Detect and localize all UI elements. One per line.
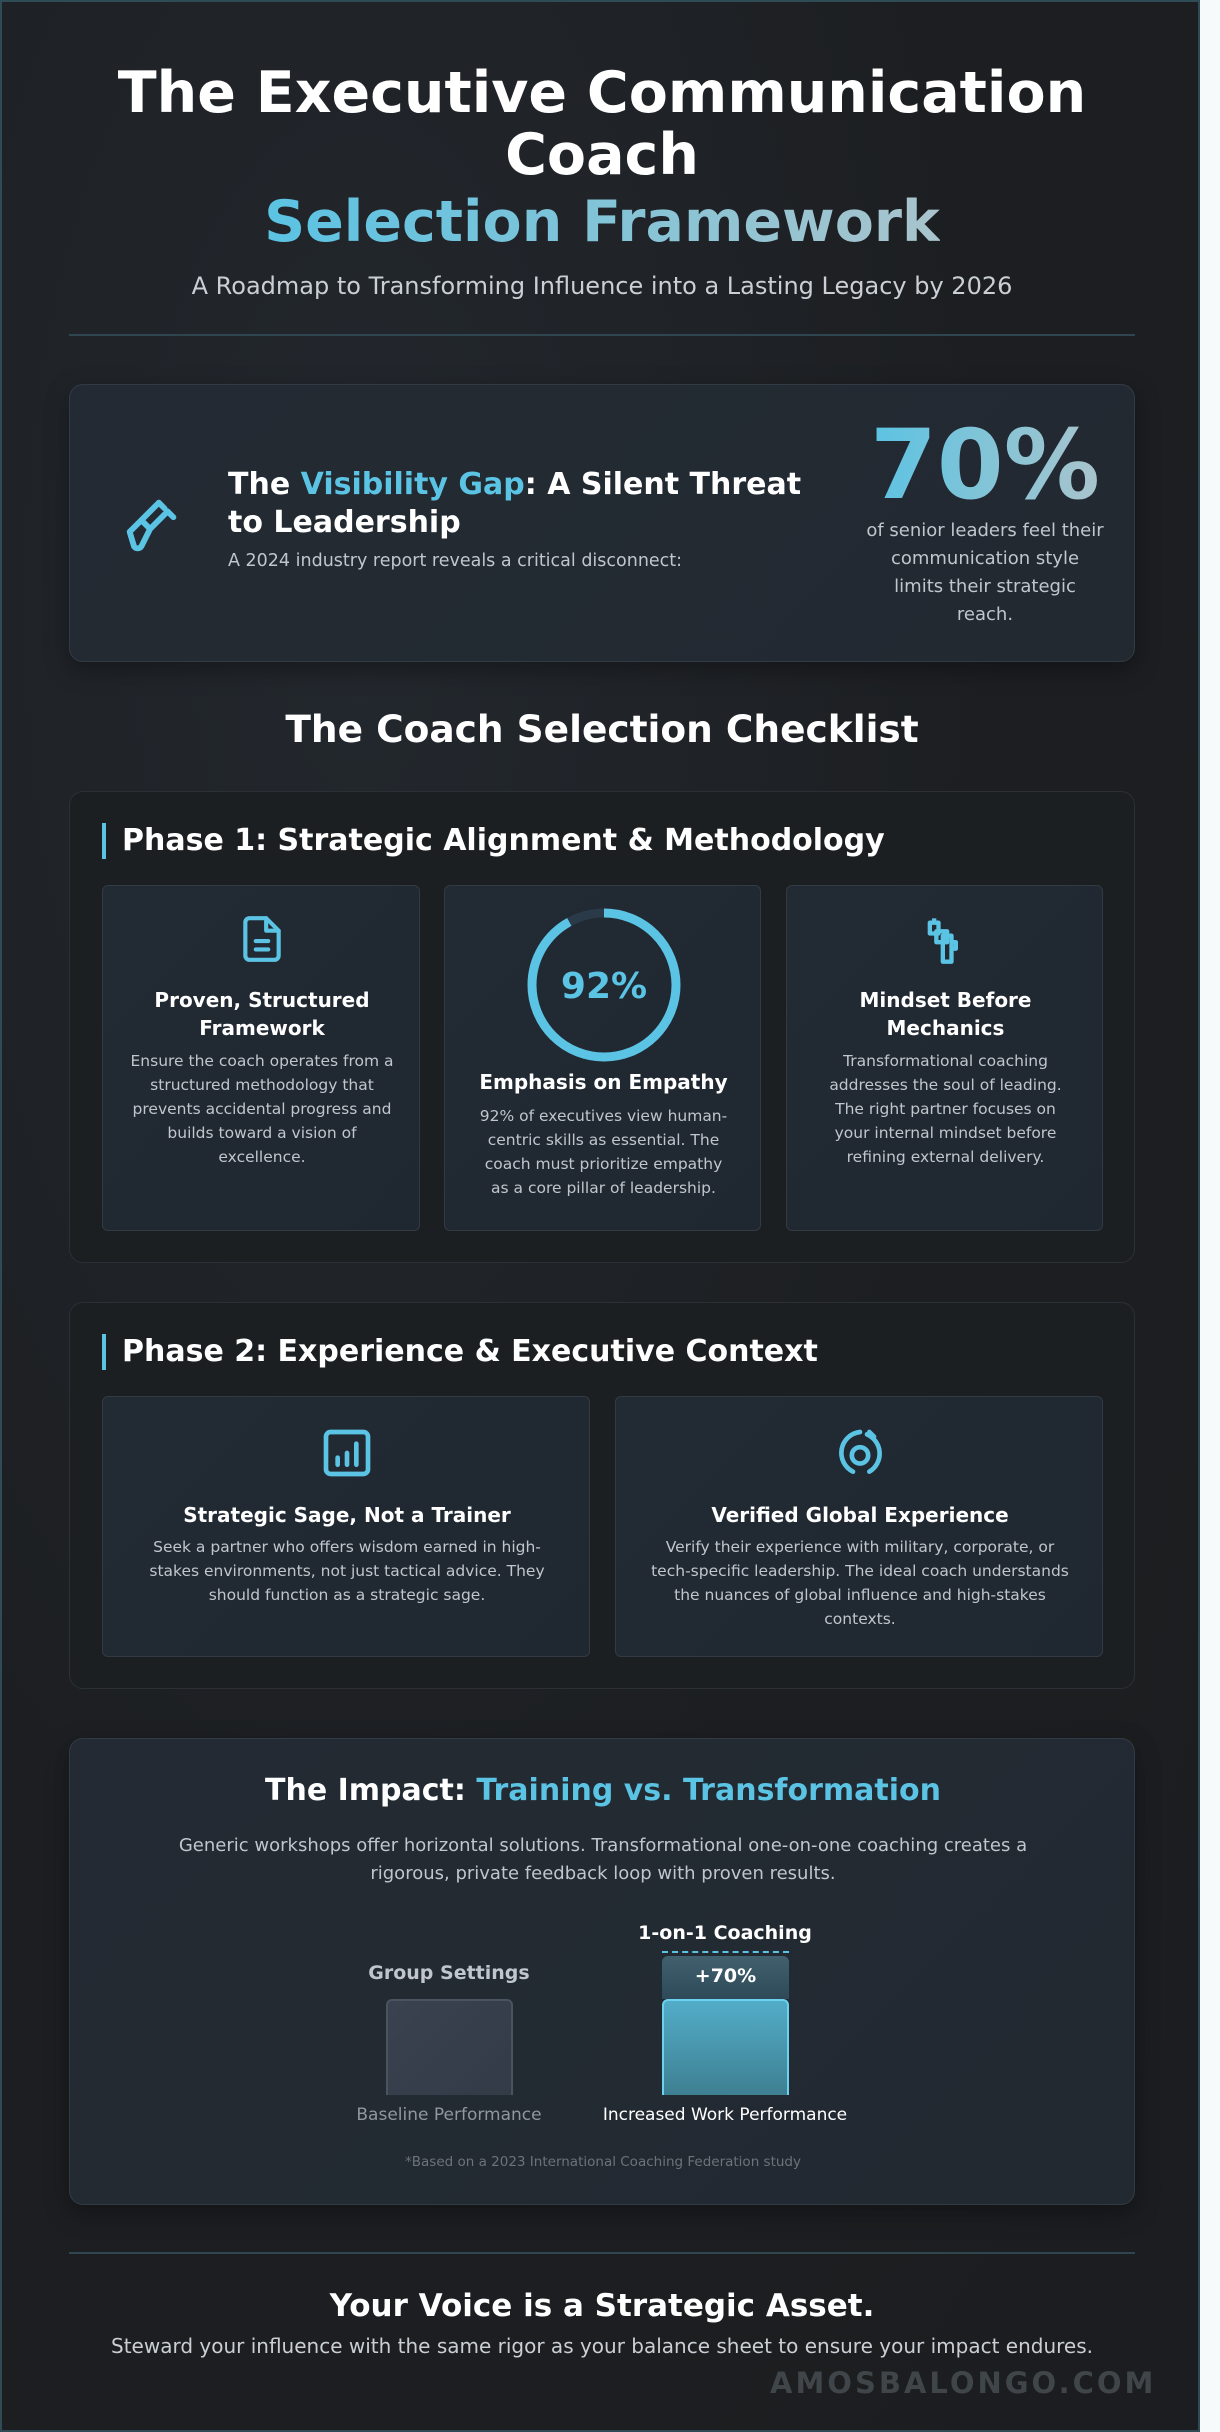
closing text: Steward your influence with the same rigor as your balance sheet to ensure your impact endures. [111,2334,1093,2358]
bar chart: +70% [695,1965,756,1987]
ring chart 92%: 92% [561,966,647,1007]
card title: Strategic Sage, Not a Trainer [183,1503,511,1527]
bar: 1-on-1 coaching: 1-on-1 Coaching [638,1922,812,1944]
card text: 92% of executives view human-centric skills as essential. The coach must prioritize empathy as a core pillar of leadership. [480,1107,727,1197]
bar chart [356,1922,847,2125]
ring chart 92% [528,908,680,1062]
icon: megaphone [126,500,176,552]
card title: Emphasis on Empathy [479,1070,728,1094]
card title: Proven, Structured Framework [154,988,370,1040]
heading: The Visibility Gap: A Silent Threat to Leadership [228,467,801,540]
card title: Verified Global Experience [711,1503,1009,1527]
bar chart: Increased Work Performance [603,2105,847,2125]
card text: Seek a partner who offers wisdom earned in high-stakes environments, not just tactical advice. They should function as a strategic sage. [149,1538,545,1604]
title [118,60,1086,188]
stat 70%: 70% [870,409,1100,521]
icon: global cycle [839,1430,882,1474]
icon: document [243,916,281,962]
impact heading: The Impact: Training vs. Transformation [265,1773,941,1808]
card text: Verify their experience with military, corporate, or tech-specific leadership. The ideal coach understands the nuances of global influence and high-stakes contexts. [651,1538,1069,1628]
title accent: Selection Framework [264,189,940,255]
card: mindset [786,885,1103,1231]
panel: impact [69,1738,1135,2205]
stat description: of senior leaders feel their communication style limits their strategic reach. [866,520,1104,625]
panel: visibility gap [69,384,1135,662]
bar: group settings: Group Settings [368,1962,530,1984]
intro text: A 2024 industry report reveals a critical disconnect: [228,551,682,571]
panel: phase 2 [69,1302,1135,1689]
title: The Executive Communication [118,60,1086,126]
subtitle: A Roadmap to Transforming Influence into a Lasting Legacy by 2026 [192,272,1012,300]
phase 2 heading: Phase 2: Experience & Executive Context [122,1334,818,1369]
impact text: Generic workshops offer horizontal solutions. Transformational one-on-one coaching creates a rigorous, private feedback loop with proven results. [179,1835,1027,1884]
icon: mindset puzzle [928,918,958,964]
watermark: AMOSBALONGO.COM [770,2366,1156,2400]
closing heading: Your Voice is a Strategic Asset. [330,2288,874,2324]
section heading: The Coach Selection Checklist [285,707,919,751]
panel: phase 1 [69,791,1135,1263]
card: empathy [444,885,761,1231]
card: structured framework [102,885,420,1231]
footnote: *Based on a 2023 International Coaching Federation study [405,2154,801,2170]
card: strategic sage [102,1396,590,1657]
card: global experience [615,1396,1103,1657]
card text: Ensure the coach operates from a structured methodology that prevents accidental progress and builds toward a vision of excellence. [130,1052,394,1166]
icon: chart [324,1430,370,1476]
card title: Mindset Before Mechanics [860,988,1031,1040]
bar chart: Baseline Performance [356,2105,542,2125]
title: Coach [505,122,699,188]
phase 1 heading: Phase 1: Strategic Alignment & Methodology [122,823,885,858]
card text: Transformational coaching addresses the soul of leading. The right partner focuses on your internal mindset before refining external delivery. [829,1052,1062,1166]
